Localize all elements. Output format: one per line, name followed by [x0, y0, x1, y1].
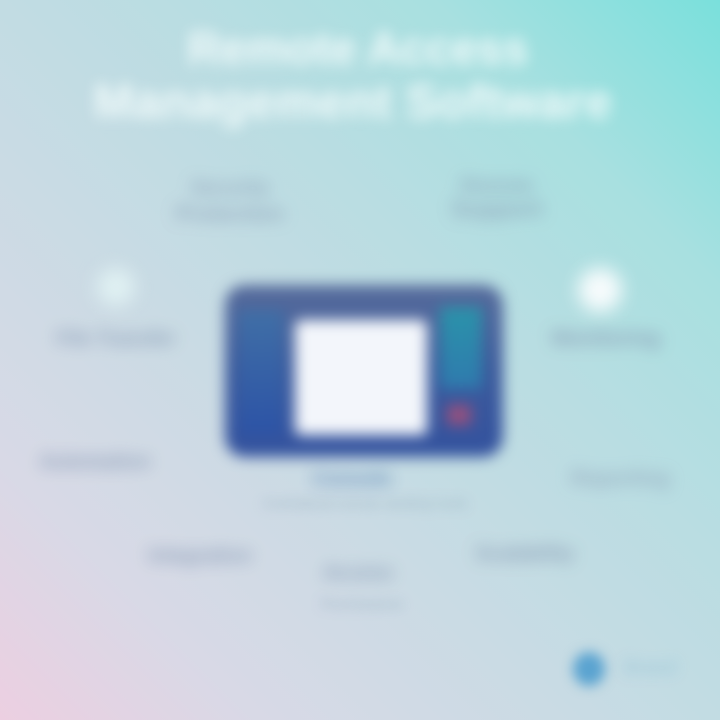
label: bottom center detail: Permissions: [321, 596, 403, 613]
icon: left node: [97, 268, 135, 306]
label: top left: [175, 177, 284, 226]
label: bottom right: Scalability: [476, 543, 574, 565]
label: top left: Security: [191, 177, 269, 199]
label: lower left: Automation: [39, 451, 151, 473]
monitor right teal column: [440, 307, 482, 389]
label: top right: Support: [451, 196, 543, 223]
label: bottom left: Integration: [148, 545, 252, 567]
central monitor panel: [225, 285, 503, 457]
center caption: Console: [313, 468, 391, 490]
monitor red status: [447, 405, 471, 425]
label: middle right: Monitoring: [552, 327, 660, 350]
logo text: Brand: [623, 657, 677, 679]
monitor white screen: [295, 320, 427, 435]
label: top left: Protection: [176, 201, 284, 226]
label: top right: [450, 175, 543, 224]
monitor left sidebar: [239, 310, 283, 435]
logo icon: [573, 652, 605, 686]
label: middle left: File Transfer: [57, 328, 175, 350]
center caption detail: Centralized remote desktop tools: [263, 495, 467, 511]
label: top right: Remote: [460, 175, 534, 197]
title: Remote Access: [188, 22, 528, 74]
subtitle heading: Management Software: [94, 76, 612, 129]
icon: right node: [578, 268, 622, 312]
label: bottom center: Access: [323, 562, 393, 584]
label: lower right: Reporting: [570, 467, 670, 490]
